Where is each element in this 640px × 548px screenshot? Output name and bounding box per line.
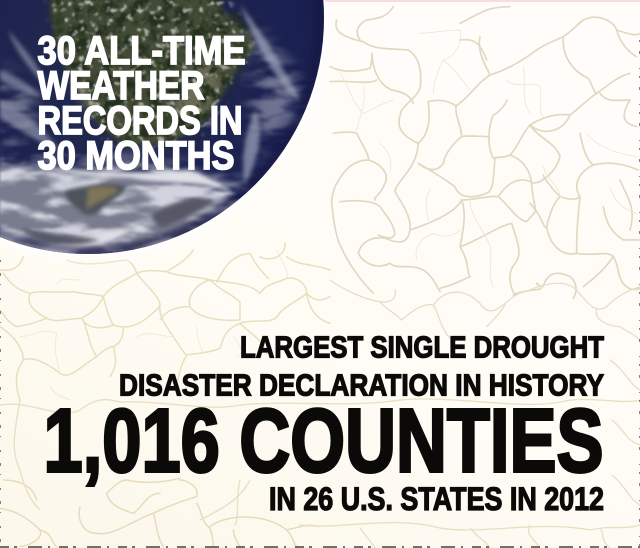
left ocean cloud streaks bbox=[0, 30, 60, 150]
limb shading bbox=[0, 0, 320, 250]
cracks behind statistic bbox=[0, 360, 640, 548]
left torn edge bbox=[0, 260, 2, 548]
cracks lower right bbox=[330, 280, 640, 340]
earth headline bbox=[38, 29, 246, 178]
land mottling bbox=[48, 0, 253, 148]
earth globe bbox=[0, 0, 330, 256]
cloud streaks bbox=[0, 27, 306, 254]
earth glow bbox=[0, 0, 338, 268]
land highlights bbox=[75, 60, 220, 130]
land clouds bbox=[44, 0, 256, 152]
top edge tint bbox=[325, 0, 640, 2]
earth headline: RECORDS IN bbox=[38, 99, 242, 143]
drought statistic bbox=[44, 330, 604, 517]
fine cracks mid left bbox=[20, 250, 287, 400]
bottom torn edge bbox=[0, 546, 640, 548]
ocean bbox=[0, 0, 330, 256]
earth headline: 30 ALL-TIME bbox=[38, 29, 246, 73]
cracks bottom left bbox=[0, 478, 320, 547]
south america landmass bbox=[50, 0, 255, 145]
cracks mid left bbox=[0, 243, 330, 400]
fine cracks upper right bbox=[340, 30, 637, 287]
right torn edge bbox=[638, 40, 640, 548]
earth headline: WEATHER bbox=[38, 64, 204, 108]
cracks upper right bbox=[330, 7, 640, 298]
argentina highlight bbox=[86, 186, 118, 210]
dark cloud shadows bbox=[20, 198, 215, 244]
argentina landmass bbox=[64, 184, 126, 215]
bright cloud band bbox=[30, 165, 232, 248]
right ocean cloud streaks bbox=[240, 5, 300, 185]
grey base of southern clouds bbox=[0, 165, 225, 253]
earth headline: 30 MONTHS bbox=[38, 134, 234, 178]
